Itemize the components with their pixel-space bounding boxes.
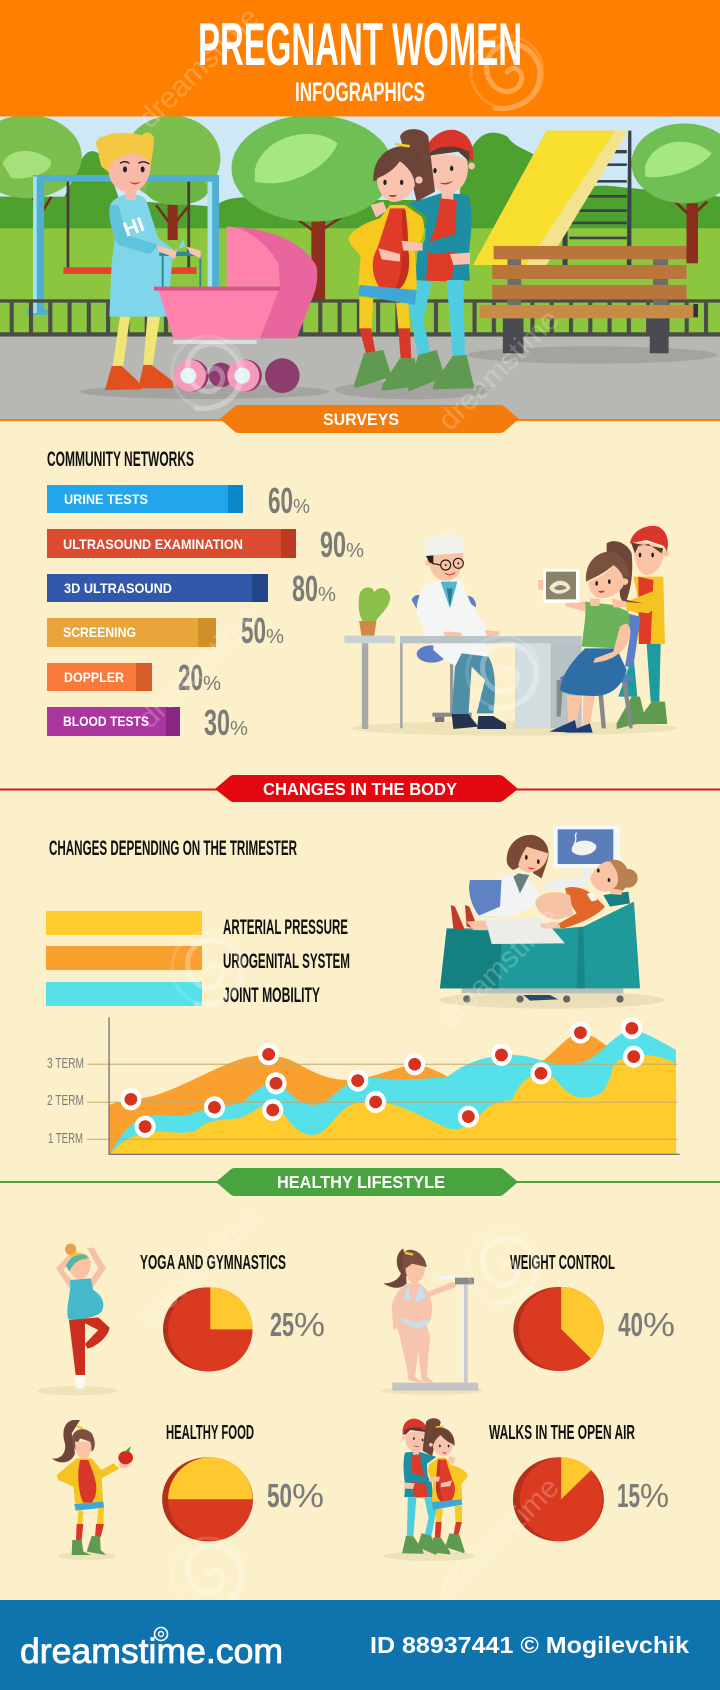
header band <box>0 0 720 116</box>
legend: joint mobility: JOINT MOBILITY <box>223 984 320 1007</box>
footer band: ID 88937441 © Mogilevchik <box>370 1632 689 1658</box>
bar: doppler: DOPPLER <box>64 669 124 685</box>
doctor <box>412 535 506 729</box>
bar percentages: 80 <box>292 568 318 609</box>
section banner: surveys <box>0 405 720 433</box>
watermark: dreamstime <box>132 1201 266 1335</box>
road <box>0 337 720 420</box>
activity percentages: % <box>294 1306 325 1343</box>
bar percentages: 90 <box>320 524 346 565</box>
bar: blood tests <box>47 707 180 736</box>
ultrasound photo <box>538 569 579 603</box>
watermark: dreamstime <box>432 1471 566 1605</box>
fence <box>0 299 720 337</box>
bar: screening <box>47 618 216 647</box>
watermark: dreamstime <box>132 1 266 135</box>
trees <box>0 115 720 300</box>
data points <box>120 1017 644 1138</box>
legend: arterial pressure: ARTERIAL PRESSURE <box>223 916 348 939</box>
watermark <box>132 1 566 1611</box>
bar percentages: % <box>346 540 364 562</box>
bar: urine tests <box>47 485 243 513</box>
bar chart: community networks <box>47 485 296 736</box>
bar: urine tests: URINE TESTS <box>64 491 148 507</box>
activity percentages <box>267 1306 675 1514</box>
bar: 3d ultrasound: 3D ULTRASOUND <box>64 580 172 596</box>
footer band: dreamstime.com <box>20 1632 283 1671</box>
pie: weight control 40% <box>513 1287 603 1371</box>
chart axis labels: 1 TERM <box>48 1130 83 1147</box>
activity percentages: 25 <box>270 1306 294 1343</box>
activity percentages: 50 <box>267 1477 292 1514</box>
section banner: changes in the body: CHANGES IN THE BODY <box>263 779 457 799</box>
bar: ultrasound examination: ULTRASOUND EXAMINATION <box>63 536 243 552</box>
legend: urogenital system <box>46 946 350 973</box>
patient legs and heels <box>451 905 488 930</box>
pie charts <box>162 1287 604 1541</box>
ultrasound examination illustration <box>439 826 664 1009</box>
pie: healthy food 50% <box>162 1457 253 1541</box>
park scene illustration <box>0 115 720 420</box>
bar: screening: SCREENING <box>63 624 136 640</box>
legend: urogenital system: UROGENITAL SYSTEM <box>223 950 350 973</box>
doctor consultation illustration <box>344 526 677 736</box>
bar percentages: % <box>293 496 310 518</box>
section banner: healthy lifestyle <box>0 1168 720 1196</box>
bar percentages: % <box>230 718 248 740</box>
legend: joint mobility <box>46 982 320 1007</box>
patient seated <box>549 541 643 733</box>
activity percentages: % <box>292 1477 324 1514</box>
bench <box>467 246 717 364</box>
bar: 3d ultrasound <box>47 574 268 602</box>
legend: arterial pressure <box>46 911 348 939</box>
chart axis labels: 2 TERM <box>47 1092 84 1109</box>
activity titles: YOGA AND GYMNASTICS <box>140 1252 286 1274</box>
figure: yoga <box>37 1244 117 1395</box>
activity titles: WEIGHT CONTROL <box>510 1252 615 1274</box>
section banner: healthy lifestyle: HEALTHY LIFESTYLE <box>277 1172 445 1192</box>
girl with stroller <box>80 133 330 399</box>
girl with stroller: HI <box>120 213 148 242</box>
bar percentages: % <box>203 673 221 695</box>
activity percentages: 40 <box>618 1306 643 1343</box>
desk top <box>400 636 582 643</box>
activity percentages: % <box>643 1306 675 1343</box>
pie: yoga 25% <box>163 1287 253 1371</box>
bar percentages: 60 <box>268 480 293 521</box>
heading: trimester: CHANGES DEPENDING ON THE TRIMESTER <box>49 837 297 860</box>
bar: ultrasound examination <box>47 529 296 558</box>
chart axis labels: 3 TERM <box>47 1055 84 1072</box>
bar: blood tests: BLOOD TESTS <box>63 713 149 729</box>
sonographer <box>477 835 549 917</box>
legend <box>46 911 350 1007</box>
activity percentages: % <box>640 1477 669 1514</box>
bar: doppler <box>47 663 152 691</box>
bar percentages: 50 <box>241 610 266 651</box>
figure: healthy food <box>52 1420 133 1560</box>
activity percentages: 15 <box>617 1477 640 1514</box>
plant <box>359 587 390 636</box>
figure: couple walking <box>384 1418 476 1561</box>
slide <box>473 131 631 265</box>
watermark: dreamstime <box>432 901 566 1035</box>
bar percentages <box>178 480 364 743</box>
patient <box>535 860 638 928</box>
section banner: changes in the body <box>0 775 720 802</box>
activity titles <box>140 1252 635 1444</box>
activity titles: HEALTHY FOOD <box>166 1422 254 1444</box>
figure: weight control <box>380 1248 483 1395</box>
subtitle: INFOGRAPHICS <box>295 77 425 107</box>
chart axis labels <box>47 1055 84 1147</box>
couple <box>348 129 475 392</box>
swing <box>27 175 219 315</box>
desk base <box>400 643 582 728</box>
sheet <box>478 918 565 944</box>
watermark: dreamstime <box>432 303 566 437</box>
footer band <box>0 1600 720 1690</box>
bar percentages: % <box>266 626 284 648</box>
watermark: dreamstime <box>132 601 266 735</box>
man standing behind <box>617 526 669 729</box>
bar percentages: 20 <box>178 657 203 698</box>
area chart <box>87 1017 680 1155</box>
section banner: surveys: SURVEYS <box>323 411 399 429</box>
pie: walks 15% <box>513 1457 604 1541</box>
bar percentages: % <box>318 584 336 606</box>
bar percentages: 30 <box>204 702 230 743</box>
heading: community networks: COMMUNITY NETWORKS <box>47 448 194 471</box>
